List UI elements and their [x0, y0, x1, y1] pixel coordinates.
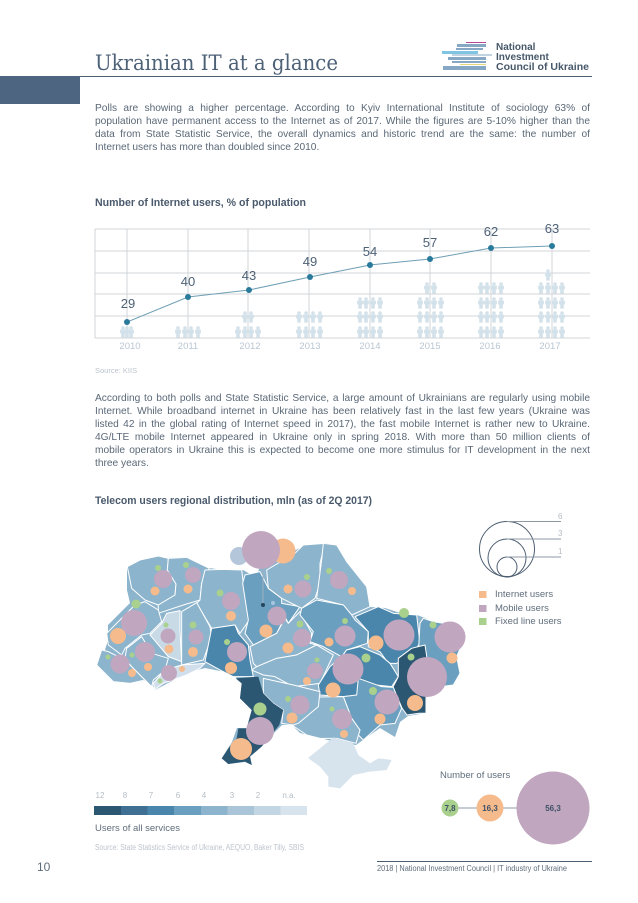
size legend: nested circles: [480, 512, 563, 577]
logo: [442, 42, 589, 73]
year labels: 2016: [479, 341, 501, 352]
year labels: 2014: [359, 341, 381, 352]
number of users bubbles: 7,8: [444, 804, 456, 813]
data values: 43: [242, 268, 256, 283]
map bubbles: Kyiv city: [230, 531, 296, 607]
intro paragraph: Polls are showing a higher percentage. According to Kyiv International Institute of sociology 63% of: [95, 103, 590, 114]
data points: [124, 243, 555, 325]
colour scale: 4: [202, 791, 207, 800]
logo: National: [496, 42, 536, 53]
map bubbles: regional internet, mobile and fixed users: [106, 562, 466, 760]
logo: Investment: [496, 52, 549, 63]
page number: 10: [37, 860, 51, 874]
data values: 57: [423, 235, 437, 250]
data values: 29: [121, 296, 135, 311]
colour scale: 12: [96, 791, 105, 800]
second paragraph: Internet. While broadband internet in Ukraine has been relatively fast in the last few years (Ukraine was: [95, 406, 590, 417]
data values: [121, 221, 559, 311]
intro paragraph: data from State Statistic Service, the overall dynamics and historic trend are the same: the number of: [95, 129, 590, 140]
colour scale: 7: [149, 791, 154, 800]
second paragraph: three years.: [95, 458, 149, 469]
colour legend: Internet users: [495, 589, 553, 600]
data values: 49: [303, 254, 317, 269]
map of Ukraine regions: [97, 543, 465, 788]
number of users bubbles: [442, 772, 590, 844]
colour scale: 3: [230, 791, 235, 800]
footer text: 2018 | National Investment Council | IT industry of Ukraine: [377, 864, 567, 873]
header rule: [80, 76, 592, 77]
line chart: internet users: [95, 221, 590, 352]
number of users bubbles: 56,3: [545, 804, 561, 813]
year labels: 2017: [539, 341, 561, 352]
size legend: nested circles: 6: [558, 512, 563, 521]
colour scale: [94, 791, 307, 815]
size legend: nested circles: 1: [558, 547, 563, 556]
second paragraph: According to both polls and State Statistic Service, a large amount of Ukrainians are regularly using mobile: [95, 393, 590, 404]
size legend: nested circles: 3: [558, 529, 563, 538]
pictogram people: [120, 269, 565, 338]
second paragraph: listed 42 in the global rating of Internet speed in 2017), the fast mobile Internet is rather new to Ukraine.: [95, 419, 590, 430]
logo: Council of Ukraine: [496, 62, 589, 73]
intro paragraph: Internet users has more than doubled since 2010.: [95, 142, 319, 153]
title: Ukrainian IT at a glance: [95, 51, 338, 76]
intro paragraph: population have permanent access to the Internet as of 2017. While the figures are 5-10% higher than the: [95, 116, 590, 127]
colour scale: 6: [176, 791, 181, 800]
colour scale: 2: [256, 791, 261, 800]
heading: internet users chart: Number of Internet users, % of population: [95, 197, 306, 209]
header colour block: [0, 76, 80, 104]
year labels: 2011: [178, 341, 198, 352]
colour scale: n.a.: [282, 791, 296, 800]
colour legend: Fixed line users: [495, 616, 562, 627]
number of users bubbles: 16,3: [482, 804, 498, 813]
second paragraph: [95, 393, 590, 469]
data values: 54: [363, 244, 377, 259]
second paragraph: 4G/LTE mobile Internet appeared in Ukraine only in spring 2018. With more than 50 million clients of: [95, 432, 590, 443]
second paragraph: mobile operators in Ukraine this is expected to become one more stimulus for IT development in the next: [95, 445, 590, 456]
source: map: Source: State Statistics Service of Ukraine, AEQUO, Baker Tilly, SBIS: [95, 843, 304, 852]
footer rule: [377, 861, 592, 862]
intro paragraph: [95, 103, 590, 153]
colour legend: Mobile users: [495, 603, 549, 614]
year labels: 2010: [119, 341, 141, 352]
data values: 40: [181, 274, 195, 289]
data values: 63: [545, 221, 559, 236]
year labels: 2012: [239, 341, 261, 352]
year labels: 2015: [419, 341, 441, 352]
colour legend: [479, 589, 562, 627]
data line: [127, 246, 552, 322]
number of users title: Number of users: [440, 770, 510, 781]
scale title: Users of all services: [95, 823, 180, 834]
source: chart: Source: KIIS: [95, 366, 137, 375]
year labels: 2013: [299, 341, 321, 352]
year labels: [119, 341, 561, 352]
heading: telecom map: Telecom users regional distribution, mln (as of 2Q 2017): [95, 495, 372, 507]
colour scale: 8: [123, 791, 128, 800]
data values: 62: [484, 224, 498, 239]
